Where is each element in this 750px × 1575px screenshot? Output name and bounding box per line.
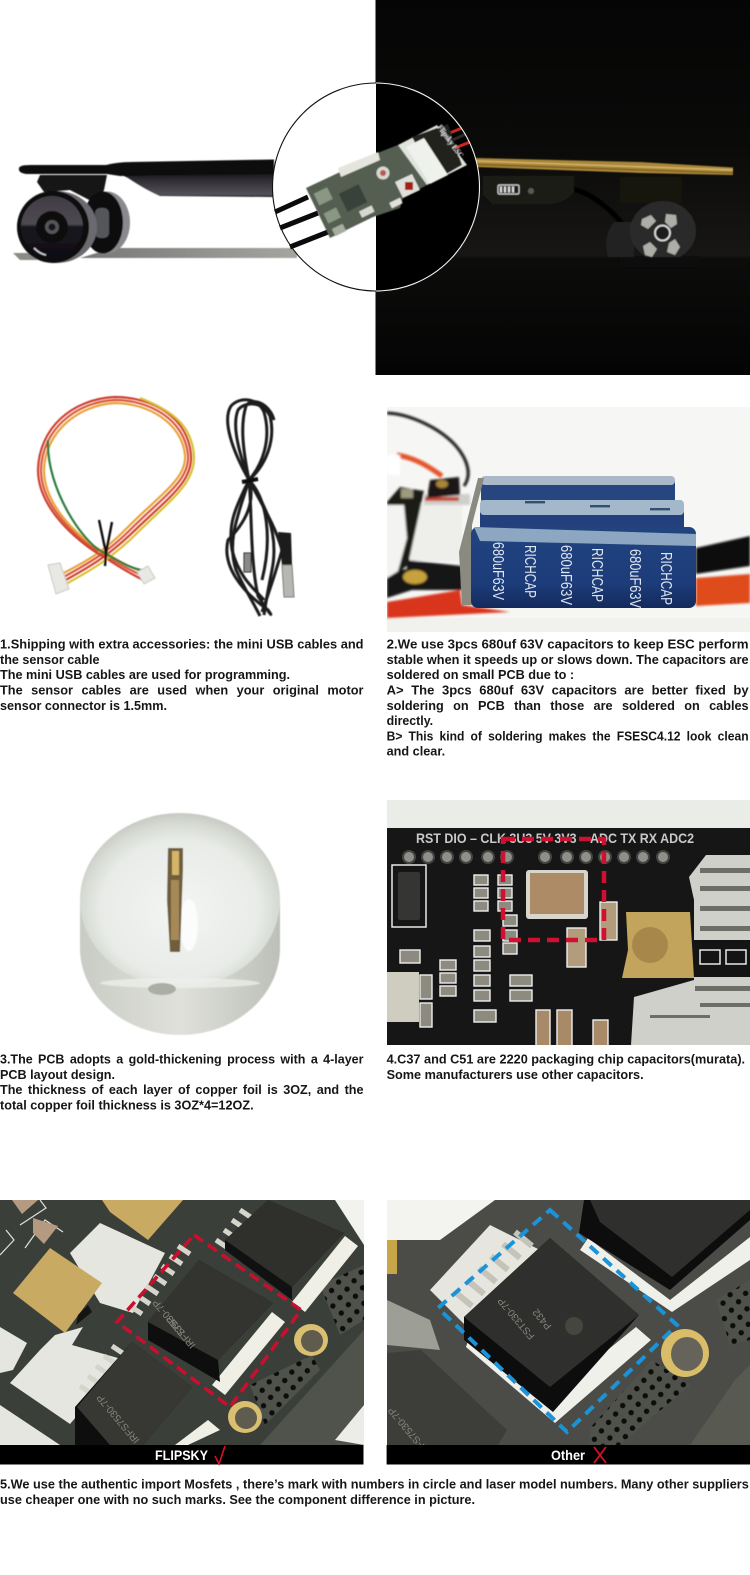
mosfet top: [225, 1200, 344, 1300]
mosfet bottom left: [386, 1350, 507, 1450]
caption 2: directly.: [387, 713, 433, 728]
front capacitor: 680uF63V: [557, 545, 574, 605]
label bar: Other: Other: [551, 1447, 585, 1463]
dark right half background: [376, 0, 750, 375]
chip capacitor C37: [526, 870, 588, 919]
caption 1: 1.Shipping with extra accessories: the mini USB cables and: [0, 636, 364, 652]
ESC board: Flipsky ESC: [435, 123, 466, 160]
mounting hole: [661, 1329, 709, 1377]
front capacitor: 680uF63V: [626, 549, 643, 608]
circle inset with ESC board: [272, 83, 480, 291]
white copper pads: [0, 1223, 165, 1445]
photo: mini USB cable: [227, 400, 294, 616]
panel 1: accessories: [0, 397, 364, 713]
caption 4: [387, 1052, 745, 1082]
caption 2: A> The 3pcs 680uf 63V capacitors are better fixed by: [387, 682, 749, 698]
skateboard: black board on white: [13, 160, 297, 263]
diode: [392, 865, 426, 927]
caption 2: and clear.: [387, 744, 445, 758]
caption 1: The sensor cables are used when your original motor: [0, 682, 364, 698]
front capacitor: RICHCAP: [521, 545, 538, 598]
gold tantalum capacitors: [12, 1200, 183, 1333]
label bar: Other: [387, 1445, 750, 1464]
caption 5: 5.We use the authentic import Mosfets , there’s mark with numbers in circle and laser model numbers. Many other suppliers: [0, 1476, 749, 1492]
silkscreen component outlines: [0, 1200, 63, 1255]
caption 5: [0, 1476, 749, 1507]
white tabs: [175, 1236, 358, 1445]
photo: black PCB closeup: [387, 800, 750, 1046]
mosfet leads: [80, 1210, 252, 1394]
capacitor metal end cap: [459, 478, 484, 605]
right connector: [137, 566, 155, 584]
small SMD components: [400, 875, 617, 1046]
mosfet center: [464, 1238, 651, 1423]
icon: battery indicator: [498, 185, 519, 194]
middle capacitor: [480, 500, 684, 527]
front wheel: [17, 191, 97, 263]
caption 2: soldering on PCB than those are soldered on cables: [387, 698, 749, 713]
photo: FLIPSKY Mosfets: [0, 1200, 364, 1445]
panel 3: PCB cross-section: [0, 813, 364, 1112]
panel 2: capacitors: [387, 407, 750, 758]
photo: sensor cable: [38, 397, 194, 594]
rear wheel: [83, 192, 130, 254]
mosfet center: 739P: [165, 1313, 188, 1338]
mosfet center: P432: [531, 1306, 554, 1331]
red dashed highlight: [117, 1235, 301, 1407]
mosfet center: FST330-7P: [496, 1295, 537, 1341]
icon: wheel hub petals: [641, 214, 680, 257]
label bar: FLIPSKY: [0, 1445, 364, 1464]
mounting holes: [228, 1324, 328, 1433]
ESC board: [306, 123, 467, 238]
front capacitor: [471, 527, 696, 608]
caption 3: 3.The PCB adopts a gold-thickening process with a 4-layer: [0, 1052, 364, 1066]
panel: hero comparison of two skateboards: [13, 0, 750, 375]
mosfet top right: [579, 1200, 750, 1312]
red dashed highlight: [503, 839, 604, 940]
photo: capacitors: [387, 407, 750, 632]
caption 1: The mini USB cables are used for programming.: [0, 667, 290, 682]
caption 2: soldered on small PCB due to :: [387, 667, 574, 682]
mosfet leads: [455, 1232, 532, 1306]
perforated ground areas: [590, 1360, 690, 1445]
caption 3: The thickness of each layer of copper foil is 3OZ, and the: [0, 1082, 364, 1097]
crystal: [387, 972, 419, 1022]
caption 3: PCB layout design.: [0, 1067, 115, 1082]
caption 1: the sensor cable: [0, 652, 100, 667]
pin holes: [403, 851, 669, 863]
panel 4: chip capacitors: [387, 800, 750, 1082]
caption 2: [387, 636, 749, 758]
front capacitor: RICHCAP: [588, 548, 605, 602]
back capacitor: [481, 476, 675, 501]
caption 3: [0, 1052, 364, 1112]
gold tantalum capacitor: [622, 912, 694, 978]
ESC power wires: [440, 128, 470, 150]
caption 3: total copper foil thickness is 3OZ*4=12OZ.: [0, 1098, 254, 1112]
mosfet lower: [75, 1342, 192, 1445]
mosfet center: IRFS7530-7P: [151, 1296, 198, 1350]
front capacitor: RICHCAP: [657, 552, 674, 605]
silkscreen labels: RST DIO – CLK 3U3 5V 3V3 – ADC TX RX ADC2: [416, 830, 694, 846]
label bar: FLIPSKY: FLIPSKY: [155, 1447, 209, 1463]
caption 1: sensor connector is 1.5mm.: [0, 698, 167, 713]
cable tie: [99, 520, 112, 566]
photo: other supplier Mosfets: [386, 1200, 750, 1450]
mosfet bottom left: FS7530-7P: [386, 1404, 427, 1450]
skateboard: wooden board on black: [476, 158, 733, 267]
ESC motor wires: [275, 197, 328, 247]
caption 4: Some manufacturers use other capacitors.: [387, 1067, 644, 1082]
mosfet lower: IRFS7530-7P: [95, 1391, 142, 1445]
front capacitor: 680uF63V: [489, 542, 506, 600]
caption 4: 4.C37 and C51 are 2220 packaging chip capacitors(murata).: [387, 1052, 745, 1066]
label sticker: [398, 125, 467, 185]
mosfet center: [148, 1260, 273, 1382]
blue dashed highlight: [438, 1210, 677, 1432]
panel 5: Mosfet comparison: [0, 1200, 750, 1507]
caption 5: use cheaper one with no such marks. See the component difference in picture.: [0, 1492, 475, 1507]
perforated ground areas: [250, 1355, 320, 1425]
caption 1: [0, 636, 364, 713]
photo: acrylic cylinder with PCB slice: [80, 813, 280, 1035]
caption 2: 2.We use 3pcs 680uf 63V capacitors to keep ESC perform: [387, 636, 749, 652]
left connector: [48, 563, 69, 594]
caption 2: stable when it speeds up or slows down. The capacitors are: [387, 652, 749, 667]
